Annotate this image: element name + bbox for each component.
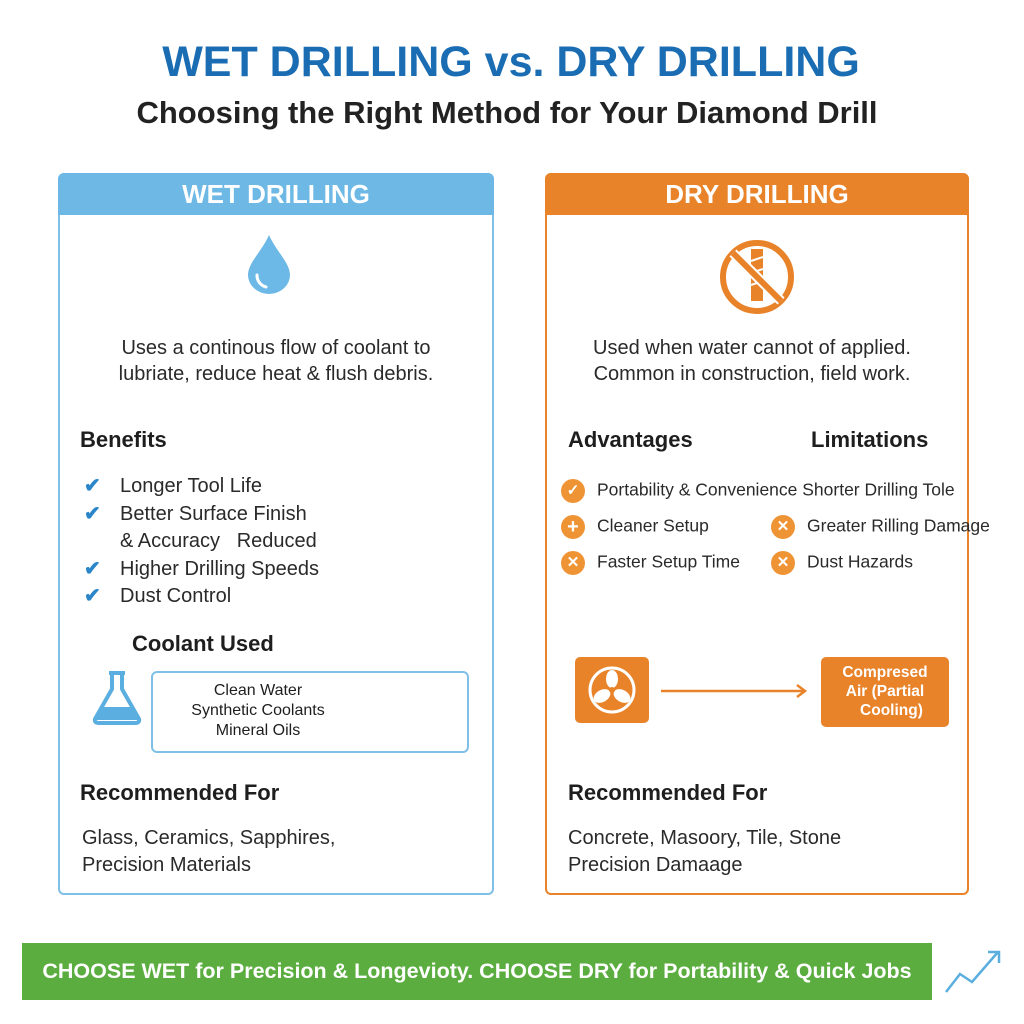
benefits list: Higher Drilling Speeds — [120, 558, 319, 580]
advantages and limitations list: ✕ — [777, 554, 789, 571]
description: lubriate, reduce heat & flush debris. — [119, 363, 433, 385]
advantages and limitations list: ✕ — [567, 554, 579, 571]
subtitle: Choosing the Right Method for Your Diamond Drill — [136, 95, 878, 130]
icon: fan — [575, 657, 649, 723]
benefits list: Dust Control — [120, 585, 231, 607]
description — [593, 337, 911, 385]
compressed air box: Compresed — [842, 664, 928, 681]
advantages and limitations list: + — [567, 516, 579, 538]
benefits list: & Accuracy Reduced — [120, 530, 317, 552]
advantages and limitations list: Portability & Convenience Shorter Drilling Tole — [597, 480, 955, 500]
recommended text: Precision Damaage — [568, 854, 743, 876]
header: wet drilling — [58, 173, 494, 215]
header: wet drilling: WET DRILLING — [182, 179, 370, 209]
heading: recommended for: Recommended For — [80, 780, 279, 805]
benefits list: ✔ — [84, 585, 101, 607]
title: WET DRILLING vs. DRY DRILLING — [162, 38, 860, 86]
coolant box: Clean Water — [214, 682, 302, 699]
advantages and limitations list: Dust Hazards — [807, 552, 913, 572]
benefits list: ✔ — [84, 558, 101, 580]
advantages and limitations list: ✕ — [777, 518, 789, 535]
benefits list: ✔ — [84, 475, 101, 497]
compressed air box: Air (Partial — [846, 683, 924, 700]
icon: water drop — [248, 235, 290, 294]
coolant box: Synthetic Coolants — [191, 702, 325, 719]
recommended text: Concrete, Masoory, Tile, Stone — [568, 827, 841, 849]
recommended text — [82, 827, 335, 876]
advantages and limitations list: ✓ — [567, 482, 579, 499]
description: Uses a continous flow of coolant to — [121, 337, 431, 359]
header: dry drilling — [545, 173, 969, 215]
heading: benefits: Benefits — [80, 427, 167, 452]
description — [119, 337, 433, 385]
panel: dry drilling — [545, 173, 969, 895]
description: Used when water cannot of applied. — [593, 337, 911, 359]
recommended text: Glass, Ceramics, Sapphires, — [82, 827, 335, 849]
benefits list — [84, 475, 319, 607]
coolant box: Mineral Oils — [216, 722, 300, 739]
advantages and limitations list — [561, 479, 990, 575]
description: Common in construction, field work. — [594, 363, 910, 385]
benefits list: Better Surface Finish — [120, 502, 307, 524]
icon: flask — [92, 671, 142, 725]
icon: trend chart — [945, 950, 1000, 993]
bottom banner — [22, 943, 932, 1000]
advantages and limitations list: Greater Rilling Damage — [807, 516, 990, 536]
compressed air box — [821, 657, 949, 727]
heading: recommended for: Recommended For — [568, 780, 767, 805]
recommended text: Precision Materials — [82, 854, 251, 876]
header: dry drilling: DRY DRILLING — [665, 179, 849, 209]
heading: coolant used: Coolant Used — [132, 631, 274, 656]
arrow — [661, 684, 807, 698]
icon: no drill — [720, 240, 794, 314]
recommended text — [568, 827, 841, 876]
compressed air box: Cooling) — [860, 702, 923, 719]
advantages and limitations list: Faster Setup Time — [597, 552, 740, 572]
benefits list: Longer Tool Life — [120, 475, 262, 497]
panel: wet drilling — [58, 173, 494, 895]
advantages and limitations list: Cleaner Setup — [597, 516, 709, 536]
bottom banner: CHOOSE WET for Precision & Longevioty. CHOOSE DRY for Portability & Quick Jobs — [42, 959, 912, 983]
coolant box — [151, 671, 469, 753]
heading: advantages: Advantages — [568, 427, 693, 452]
benefits list: ✔ — [84, 502, 101, 524]
heading: limitations: Limitations — [811, 427, 928, 452]
